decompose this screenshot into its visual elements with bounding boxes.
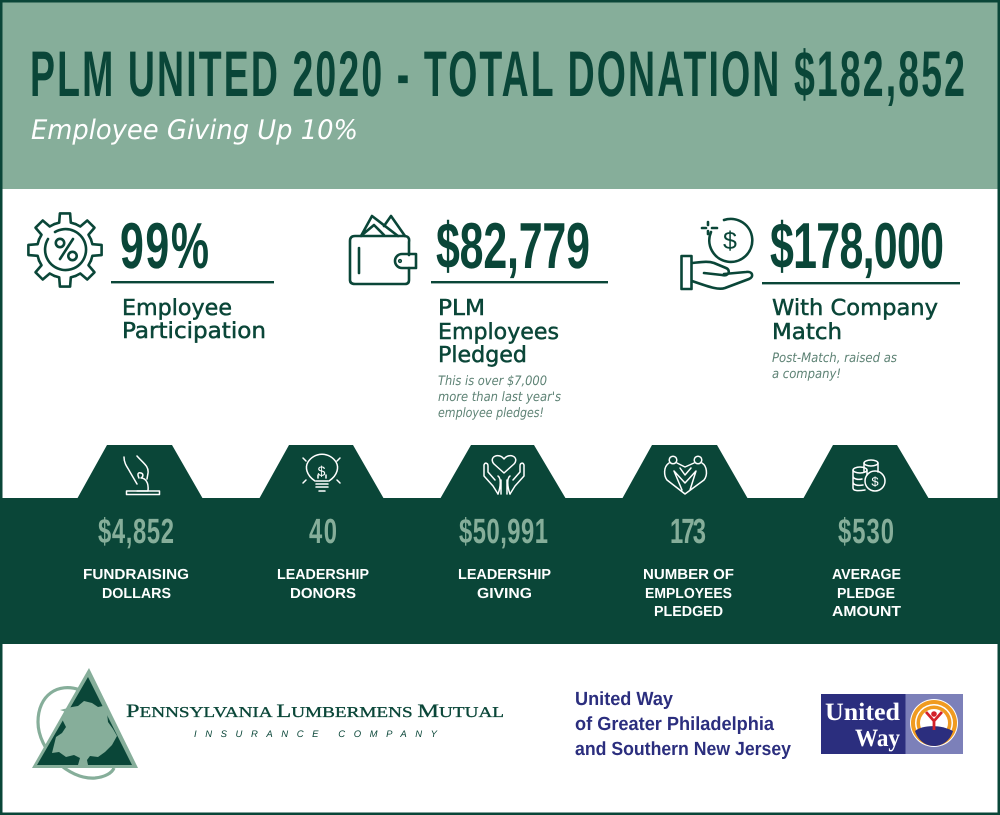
label: LEADERSHIP <box>277 567 369 583</box>
label: EMPLOYEES <box>645 586 732 602</box>
label: Employee <box>122 296 232 321</box>
value: $4,852 <box>98 512 174 551</box>
logo text: United Way of Greater Philadelphia: of Greater Philadelphia <box>575 714 774 735</box>
label: FUNDRAISING <box>83 567 189 583</box>
company tagline: INSURANCE COMPANY <box>194 729 438 740</box>
label <box>643 567 734 620</box>
logo: United Way badge: Way <box>855 725 900 752</box>
icon: hand with coin <box>682 219 752 289</box>
label <box>458 567 551 602</box>
label <box>277 567 369 602</box>
panel: employee participation <box>28 209 274 344</box>
stat: leadership giving <box>458 456 551 602</box>
label: Pledged <box>438 343 527 368</box>
label <box>832 567 901 620</box>
value: 99% <box>120 209 209 282</box>
value: $530 <box>838 512 894 551</box>
logo: United Way badge: United <box>825 699 900 726</box>
label: AMOUNT <box>832 604 901 620</box>
icon: light bulb with dollar <box>303 454 340 491</box>
value: $178,000 <box>770 209 944 282</box>
logo text: United Way of Greater Philadelphia <box>575 689 791 760</box>
company name: PENNSYLVANIA LUMBERMENS M UTUAL <box>126 701 504 722</box>
logo text: United Way of Greater Philadelphia: and Southern New Jersey <box>575 739 791 760</box>
label: NUMBER OF <box>643 567 734 583</box>
label <box>438 296 559 368</box>
logo text: United Way of Greater Philadelphia: United Way <box>575 689 673 710</box>
icon: heart with people <box>665 456 706 494</box>
label: Match <box>772 320 842 345</box>
icon: gear with percent <box>28 213 102 287</box>
label <box>772 296 938 345</box>
label: AVERAGE <box>832 567 901 583</box>
stat: leadership donors <box>277 454 369 602</box>
value: $82,779 <box>436 209 590 282</box>
label: PLEDGED <box>654 604 723 620</box>
icon: hand with coin: $ <box>723 227 737 255</box>
note: Post-Match, raised as <box>772 351 897 366</box>
label <box>122 296 266 344</box>
icon: coins: $ <box>871 474 879 489</box>
value: 40 <box>309 512 337 551</box>
label: DOLLARS <box>102 586 171 602</box>
icon: hands with heart <box>484 456 524 494</box>
header panel <box>0 0 1000 189</box>
note: This is over $7,000 <box>438 374 547 389</box>
stat: fundraising dollars <box>83 456 189 602</box>
note: employee pledges! <box>438 406 544 421</box>
note <box>438 374 561 421</box>
value: 173 <box>670 512 706 551</box>
logo: United Way badge <box>821 694 963 754</box>
icon: coins <box>853 460 885 491</box>
stat: number of employees pledged <box>643 456 734 620</box>
label: GIVING <box>477 586 532 602</box>
label: PLM <box>438 296 485 321</box>
panel: company match <box>682 209 960 382</box>
note: more than last year's <box>438 390 561 405</box>
note <box>772 351 897 382</box>
label: LEADERSHIP <box>458 567 551 583</box>
label: PLEDGE <box>837 586 895 602</box>
value: $50,991 <box>459 512 548 551</box>
label: DONORS <box>290 586 356 602</box>
label <box>83 567 189 602</box>
stat: average pledge amount <box>832 460 901 620</box>
icon: hand dropping coin <box>124 456 160 494</box>
panel: employees pledged <box>350 209 608 421</box>
title: PLM UNITED 2020 - TOTAL DONATION $182,852 <box>30 38 965 110</box>
panel: statistics band <box>0 445 1000 644</box>
note: a company! <box>772 367 841 382</box>
logo: Pennsylvania Lumbermens Mutual <box>32 668 504 778</box>
label: Employees <box>438 320 559 345</box>
label: Participation <box>122 319 266 344</box>
subtitle: Employee Giving Up 10% <box>31 115 358 146</box>
label: With Company <box>772 296 938 321</box>
icon: light bulb with dollar: $ <box>318 463 326 479</box>
icon: wallet <box>350 216 416 284</box>
logo mark: triangle and tree <box>32 668 138 778</box>
